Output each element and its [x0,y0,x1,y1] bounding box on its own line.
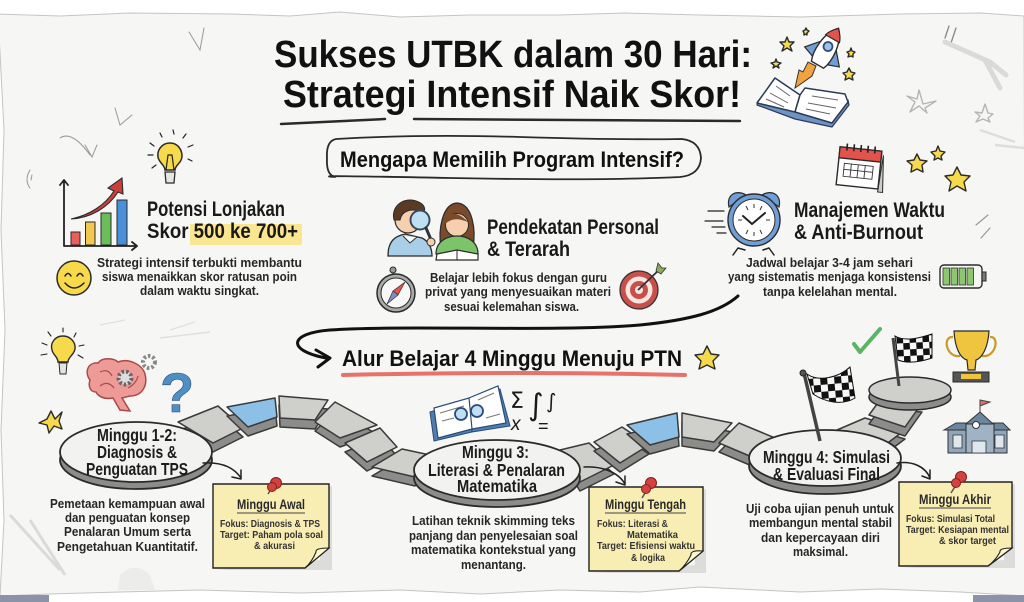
sticky note: minggu tengah [589,478,706,573]
heading: potensi: Skor 500 ke 700+ [147,220,298,243]
heading: pendekatan: Pendekatan Personal [487,216,659,239]
text: potensi description: siswa menaikkan skor ratusan poin [102,270,297,284]
icon: alarm clock with speed lines [705,193,780,255]
milestone: minggu 4: & Evaluasi Final [773,464,880,484]
heading: pendekatan [487,216,659,261]
icon: smiley [57,261,91,295]
icon group: brain, gear, question and bulb [39,328,194,433]
sticky note: minggu awal: Minggu Awal [237,497,305,512]
icon: battery [940,265,986,288]
arrow: minggu 4 to note [897,463,930,479]
arrow: minggu 1-2 to note [203,463,241,479]
icon: calendar [836,143,887,192]
text: minggu 4 description: membangun mental stabil [749,516,892,530]
text: manajemen description: Jadwal belajar 3-4 jam sehari [746,256,913,270]
text: manajemen description: tanpa kelelahan mental. [763,285,897,299]
text: minggu 3 description: matematika kontekstual yang [411,543,576,557]
milestone: minggu 3: Literasi & Penalaran [428,460,565,480]
icon: target with arrow [620,263,666,309]
milestone: minggu 1-2: Minggu 1-2: [97,425,177,445]
text: minggu 4 description: dan kepercayaan diri [761,531,880,545]
bar chart: score growth [60,178,137,250]
heading: manajemen: & Anti-Burnout [794,221,923,244]
sticky note: minggu akhir: Target: Kesiapan mental [906,524,1009,536]
heading: potensi [147,198,302,245]
heading: potensi: Potensi Lonjakan [147,198,285,221]
text: minggu 4 description [746,502,894,559]
icon group: open book with glasses and math symbols: ∫ [546,389,556,413]
text: minggu 1-2 description: dan penguatan konsep [65,511,190,525]
milestone: minggu 1-2: Diagnosis & [97,442,177,462]
sticky note: minggu akhir: Fokus: Simulasi Total [906,513,995,525]
icon: checkered flag [800,367,855,441]
sticky note: minggu awal: & akurasi [254,540,295,552]
icon: light bulb [148,130,193,183]
icon group: open book with glasses and math symbols: Σ [510,389,524,414]
sticky note: minggu tengah: Fokus: Literasi & [597,518,668,530]
heading: learning path: Alur Belajar 4 Minggu Menuju PTN [342,346,682,371]
icon group: open book with glasses and math symbols: x [510,414,522,435]
text: potensi description: Strategi intensif terbukti membantu [97,256,302,270]
sticky note: minggu akhir [899,472,1015,568]
milestone: minggu 4: Minggu 4: Simulasi [763,447,890,467]
sticky note: minggu awal: Target: Paham pola soal [220,529,323,541]
panel: heading why intensive [327,136,701,179]
icon: trophy [947,331,996,382]
icon: compass [377,267,415,312]
title: Sukses UTBK dalam 30 Hari: [274,34,752,76]
text: pendekatan description: Belajar lebih fokus dengan guru [430,271,607,285]
milestone: minggu 3: Matematika [457,476,537,496]
heading: manajemen: Manajemen Waktu [794,199,945,222]
text: minggu 3 description: menantang. [461,558,526,572]
text: minggu 1-2 description [50,497,205,554]
icon group: open book with glasses and math symbols [430,386,556,441]
text: minggu 1-2 description: Penalaran Umum serta [64,525,192,539]
title [274,34,752,124]
arrow: minggu 3 to note [584,467,625,485]
sticky note: minggu tengah: Matematika [627,529,678,541]
icon: university building [944,400,1010,453]
icon: gold stars [907,146,970,191]
text: minggu 3 description: Latihan teknik skimming teks [412,514,575,528]
icon group: open book with glasses and math symbols: = [538,416,549,436]
text: potensi description [97,256,302,298]
sticky note: minggu akhir: Minggu Akhir [919,492,992,507]
icon group: brain, gear, question and bulb: ? [160,361,194,424]
sticky note: minggu tengah: & logika [631,552,665,564]
icon: rocket over open book [757,18,856,127]
icon group: open book with glasses and math symbols: ∫ [528,388,544,423]
sticky note: minggu tengah: Target: Efisiensi waktu [597,540,695,552]
milestone: minggu 3 [414,440,580,507]
heading: manajemen [794,199,945,244]
panel: pendekatan personal [377,200,666,314]
panel: heading why intensive: Mengapa Memilih Program Intensif? [340,147,684,172]
icon: check mark [854,329,880,352]
text: manajemen description: yang sistematis menjaga konsistensi [728,270,931,284]
sticky note: minggu tengah: Minggu Tengah [605,497,686,512]
text: potensi description: dalam waktu singkat. [140,284,259,298]
text: minggu 1-2 description: Pengetahuan Kuantitatif. [57,540,198,554]
arrow: long curve to learning path heading [298,296,738,367]
text: minggu 4 description: maksimal. [793,545,848,559]
text: pendekatan description [425,271,611,314]
text: pendekatan description: sesuai kelemahan siswa. [444,300,579,314]
milestone: minggu 1-2 [60,422,212,489]
milestone: minggu 1-2: Penguatan TPS [86,459,188,479]
path: second stone segment [560,400,922,491]
milestone: minggu 4 [749,430,901,494]
text: minggu 4 description: Uji coba ujian penuh untuk [746,502,894,516]
path: first stone segment [178,396,430,486]
path: finish platform with flag [869,334,951,410]
sticky note: minggu awal: Fokus: Diagnosis & TPS [220,518,320,530]
text: manajemen description [728,256,931,299]
text: minggu 1-2 description: Pemetaan kemampuan awal [50,497,205,511]
text: pendekatan description: privat yang menyesuaikan materi [425,285,611,299]
title: Strategi Intensif Naik Skor! [283,74,741,116]
bottom corner tabs [0,595,1024,602]
panel: potensi lonjakan skor [57,130,302,298]
sticky note: minggu awal [213,478,332,570]
text: minggu 3 description [409,514,578,572]
text: minggu 3 description: panjang dan penyelesaian soal [409,529,578,543]
icon: student and tutor [388,200,478,260]
heading: pendekatan: & Terarah [487,238,570,261]
panel: manajemen waktu [705,143,986,299]
milestone: minggu 3: Minggu 3: [462,442,529,462]
sticky note: minggu akhir: & skor target [939,535,996,547]
